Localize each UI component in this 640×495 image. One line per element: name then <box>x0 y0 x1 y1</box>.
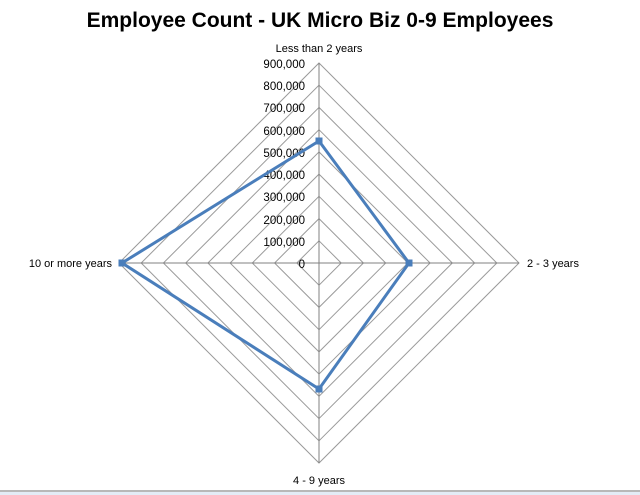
category labels <box>29 43 579 487</box>
category labels: 2 - 3 years <box>527 258 579 270</box>
axis value labels: 600,000 <box>263 126 305 138</box>
axis value labels: 300,000 <box>263 192 305 204</box>
axis value labels: 0 <box>299 259 305 271</box>
axis value labels: 200,000 <box>263 215 305 227</box>
category labels: 10 or more years <box>29 258 112 270</box>
category labels: Less than 2 years <box>276 43 363 55</box>
data series <box>118 138 412 392</box>
axis value labels: 800,000 <box>263 81 305 93</box>
grid <box>119 63 519 463</box>
axis value labels: 400,000 <box>263 170 305 182</box>
axis value labels: 500,000 <box>263 148 305 160</box>
axis value labels <box>263 59 305 271</box>
axis value labels: 700,000 <box>263 103 305 115</box>
axis value labels: 900,000 <box>263 59 305 71</box>
category labels: 4 - 9 years <box>293 475 345 487</box>
spreadsheet strip <box>0 491 640 495</box>
title: Employee Count - UK Micro Biz 0-9 Employees <box>87 9 553 32</box>
axis value labels: 100,000 <box>263 237 305 249</box>
